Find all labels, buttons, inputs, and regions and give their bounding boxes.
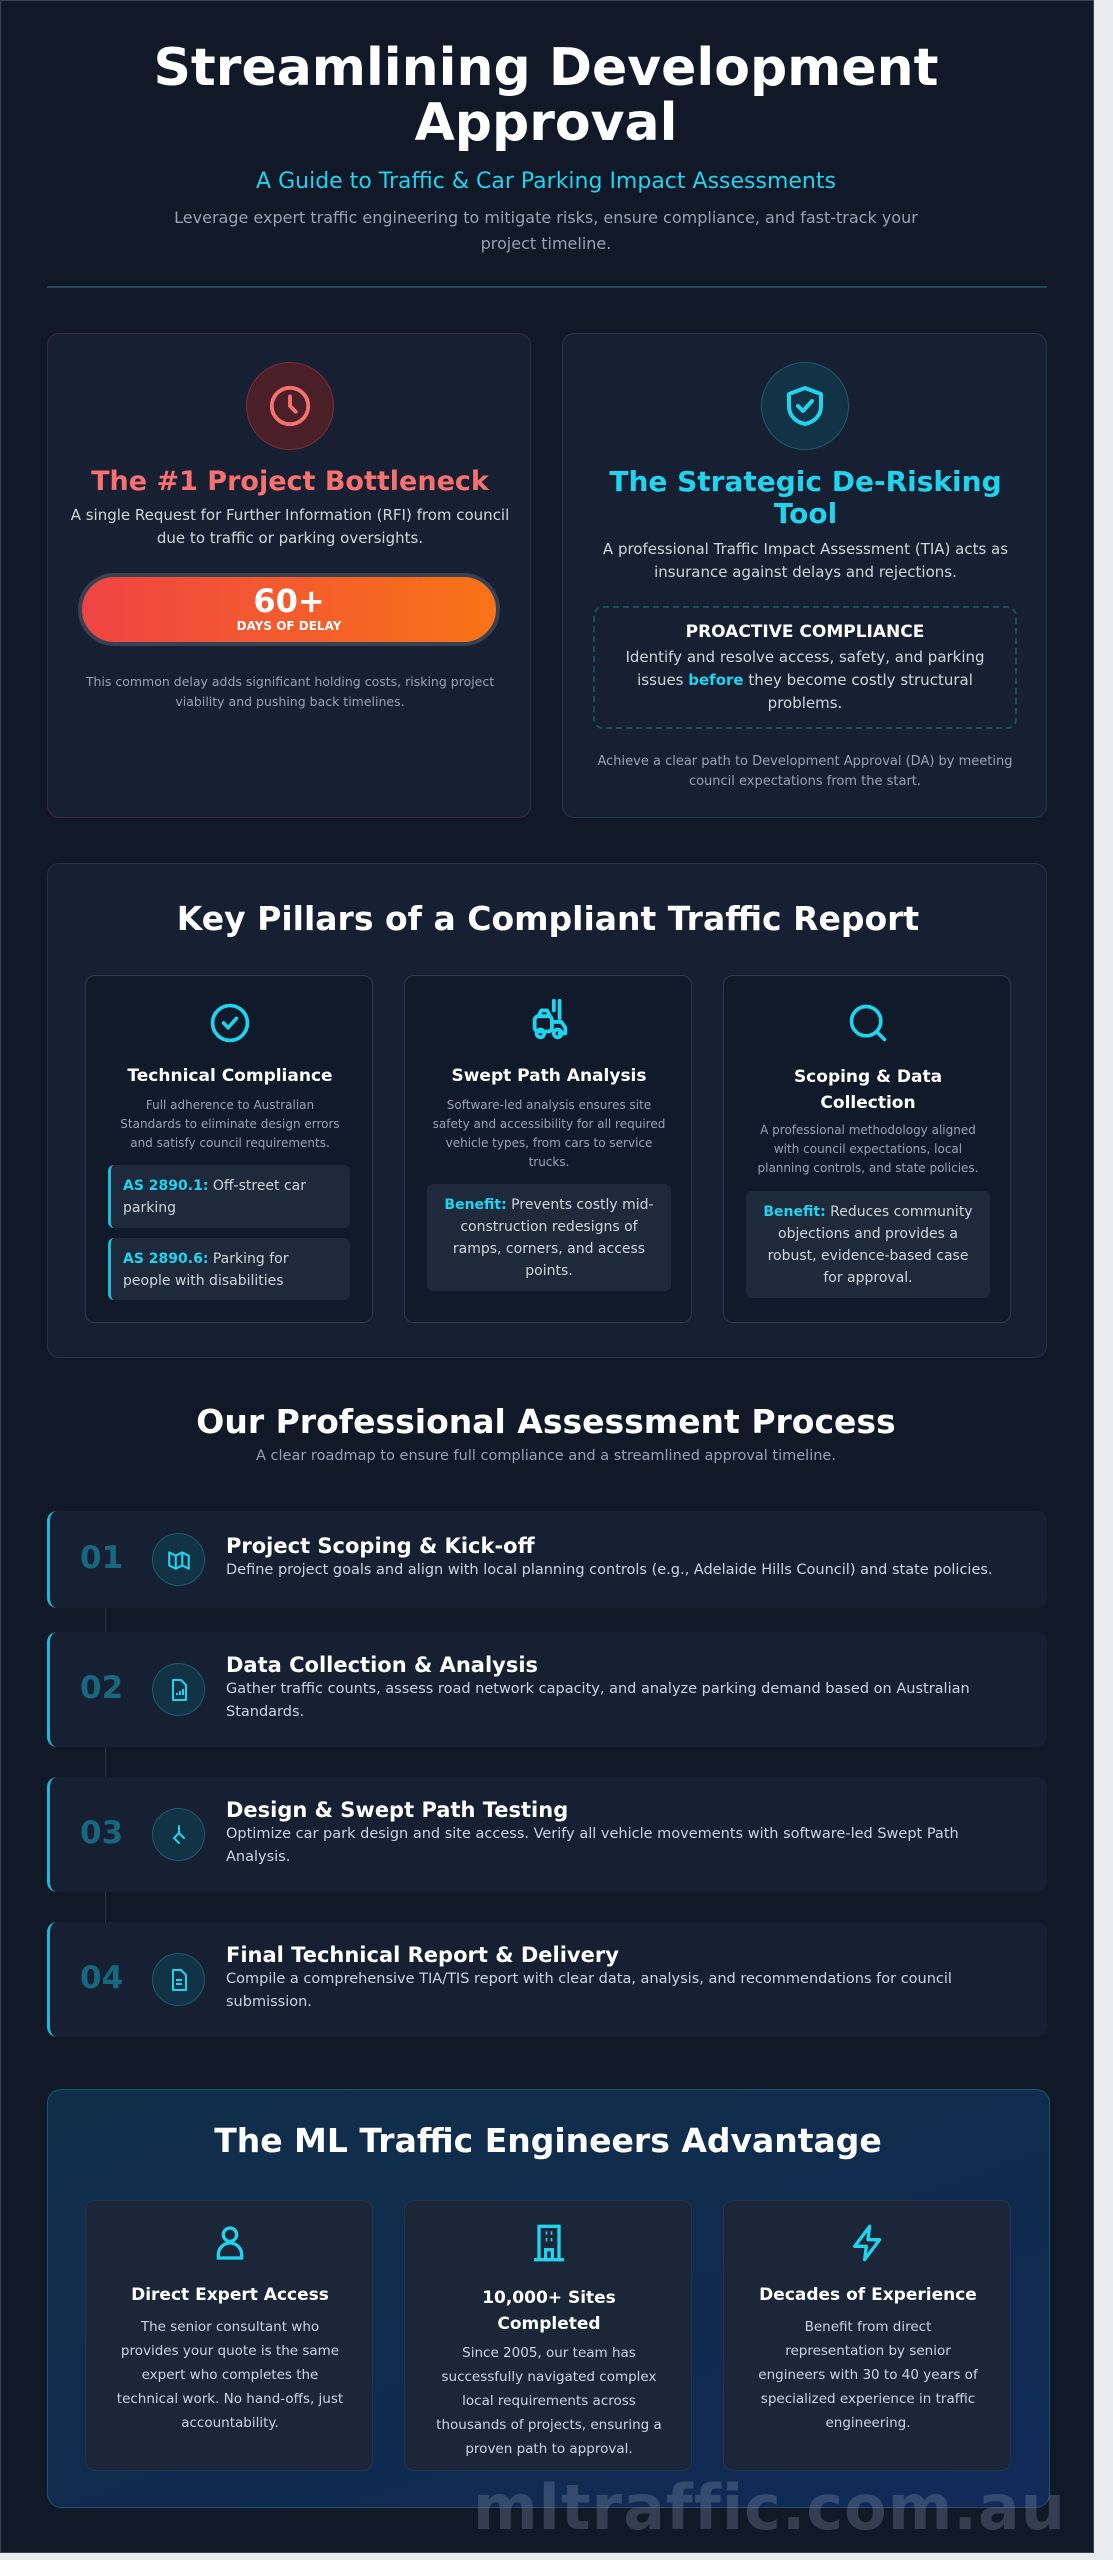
icon: check circle xyxy=(210,1004,250,1042)
callout: proactive compliance xyxy=(593,606,1017,729)
advantage: decades of experience xyxy=(723,2200,1011,2471)
pillar: technical compliance xyxy=(85,975,373,1323)
heading: Key Pillars of a Compliant Traffic Report xyxy=(177,899,919,938)
stat pill: 60+ xyxy=(253,582,325,620)
icon: path xyxy=(152,1808,205,1861)
standard: AS 2890.6: AS 2890.6: Parking for people with disabilities xyxy=(123,1251,288,1289)
step 04: Final Technical Report & Delivery xyxy=(226,1943,619,1967)
step 02: Gather traffic counts, assess road network capacity, and analyze parking demand based on Australian Standards. xyxy=(226,1681,970,1720)
title: Streamlining Development xyxy=(153,38,939,98)
standard: AS 2890.6 xyxy=(108,1238,350,1300)
step 03: Optimize car park design and site access. Verify all vehicle movements with software-led Swept Path Analysis. xyxy=(226,1826,959,1865)
benefit box xyxy=(427,1184,671,1291)
step 03: 03 xyxy=(80,1815,123,1851)
advantage: decades of experience: engineering. xyxy=(825,2415,911,2431)
benefit box: Benefit: Prevents costly mid-construction redesigns of ramps, corners, and access points. xyxy=(444,1197,654,1279)
advantage: decades of experience: representation by senior xyxy=(785,2343,951,2359)
advantage: decades of experience: Benefit from direct xyxy=(805,2319,931,2335)
pillar: swept path xyxy=(404,975,692,1323)
advantage: 10,000+ sites: 10,000+ Sites Completed xyxy=(482,2288,616,2334)
icon: vehicle xyxy=(532,998,568,1040)
advantage: direct expert access xyxy=(85,2200,373,2471)
step 01: Project Scoping & Kick-off xyxy=(226,1534,535,1558)
step 02: 02 xyxy=(80,1670,123,1706)
title: Approval xyxy=(415,93,677,153)
step 03 xyxy=(47,1777,1047,1892)
note: Achieve a clear path to Development Approval (DA) by meeting council expectations from the start. xyxy=(597,754,1012,789)
subtitle: A Guide to Traffic & Car Parking Impact Assessments xyxy=(256,169,836,194)
heading: The ML Traffic Engineers Advantage xyxy=(214,2121,882,2160)
pillar: technical compliance: Full adherence to Australian xyxy=(146,1098,314,1112)
advantage: direct expert access: Direct Expert Access xyxy=(131,2285,329,2305)
step 01 xyxy=(47,1511,1047,1608)
advantage: decades of experience: engineers with 30 to 40 years of xyxy=(758,2367,978,2383)
icon: clock xyxy=(246,362,334,450)
pillar: swept path: Software-led analysis ensures site safety and accessibility for all required vehicle types, from cars to service trucks. xyxy=(433,1098,665,1169)
step 03: Design & Swept Path Testing xyxy=(226,1798,568,1822)
step 01: Define project goals and align with local planning controls (e.g., Adelaide Hills Council) and state policies. xyxy=(226,1562,993,1578)
callout: proactive compliance: Identify and resolve access, safety, and parking issues before they become costly structural problems. xyxy=(625,648,985,712)
icon: chart document xyxy=(152,1663,205,1716)
icon: map xyxy=(152,1533,205,1586)
advantage: decades of experience: Decades of Experience xyxy=(759,2285,977,2305)
stat pill xyxy=(78,573,500,646)
pillar: scoping: A professional methodology aligned with council expectations, local planning controls, and state policies. xyxy=(758,1123,978,1175)
icon: search xyxy=(850,1004,886,1042)
callout: proactive compliance: PROACTIVE COMPLIANCE xyxy=(686,622,924,642)
watermark: mltraffic.com.au xyxy=(473,2471,1066,2544)
pillar: technical compliance: Technical Compliance xyxy=(127,1066,333,1086)
benefit box xyxy=(746,1191,990,1298)
title xyxy=(153,38,939,153)
step 04: 04 xyxy=(80,1960,123,1996)
pillar: scoping: Scoping & Data Collection xyxy=(794,1067,942,1113)
heading: process: Our Professional Assessment Process xyxy=(196,1402,896,1441)
panel: key pillars xyxy=(47,863,1047,1358)
icon: person xyxy=(216,2226,244,2260)
intro text: Leverage expert traffic engineering to mitigate risks, ensure compliance, and fast-track your project timeline. xyxy=(174,208,918,253)
panel: advantage xyxy=(47,2089,1050,2508)
icon: lightning xyxy=(852,2224,882,2262)
advantage: decades of experience: specialized experience in traffic xyxy=(761,2391,975,2407)
advantage: 10,000+ sites xyxy=(404,2200,692,2471)
subtitle: process: A clear roadmap to ensure full compliance and a streamlined approval timeline. xyxy=(256,1448,836,1464)
step 04 xyxy=(47,1922,1047,2037)
advantage: 10,000+ sites: Since 2005, our team has successfully navigated complex local requirements across thousands of projects, ensuring a proven path to approval. xyxy=(436,2345,662,2457)
icon: shield xyxy=(761,362,849,450)
panel: bottleneck xyxy=(47,333,531,818)
icon: building xyxy=(534,2224,564,2262)
benefit box: Benefit: Reduces community objections and provides a robust, evidence-based case for approval. xyxy=(763,1204,973,1286)
panel: de-risking xyxy=(562,333,1047,818)
pillar: scoping xyxy=(723,975,1011,1323)
note: This common delay adds significant holding costs, risking project viability and pushing back timelines. xyxy=(86,674,494,709)
text: A single Request for Further Information (RFI) from council due to traffic or parking oversights. xyxy=(71,506,509,547)
pillar: swept path: Swept Path Analysis xyxy=(451,1066,647,1086)
pillar: technical compliance: Standards to eliminate design errors and satisfy council requirements. xyxy=(120,1117,340,1150)
step 02: Data Collection & Analysis xyxy=(226,1653,538,1677)
stat pill: DAYS OF DELAY xyxy=(237,619,341,633)
step 02 xyxy=(47,1632,1047,1747)
standard: AS 2890.1 xyxy=(108,1165,350,1228)
heading: The #1 Project Bottleneck xyxy=(91,466,489,497)
step 01: 01 xyxy=(80,1540,123,1576)
standard: AS 2890.1: AS 2890.1: Off-street car parking xyxy=(123,1178,306,1216)
advantage: direct expert access: The senior consultant who provides your quote is the same expert who completes the technical work. No hand-offs, just accountability. xyxy=(117,2319,343,2431)
icon: document xyxy=(152,1953,205,2006)
heading: The Strategic De-Risking Tool xyxy=(609,465,1002,530)
text: A professional Traffic Impact Assessment (TIA) acts as insurance against delays and rejections. xyxy=(603,540,1008,581)
step 04: Compile a comprehensive TIA/TIS report with clear data, analysis, and recommendations for council submission. xyxy=(226,1971,952,2010)
